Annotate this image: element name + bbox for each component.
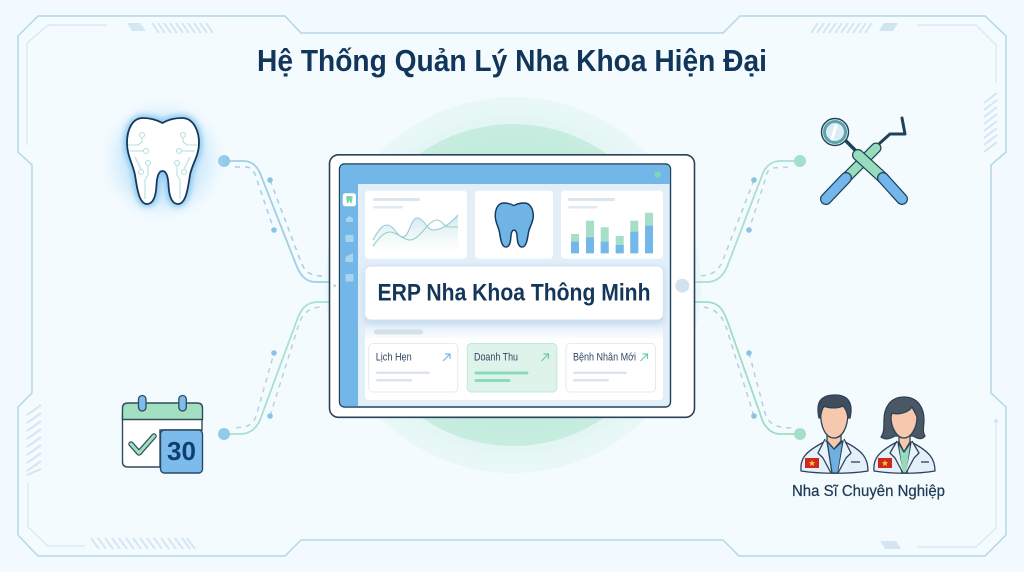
card: new patients: Bệnh Nhân Mới [573, 352, 636, 364]
card: line chart [365, 191, 467, 259]
label: professional dentists: Nha Sĩ Chuyên Nghiệp [792, 483, 945, 500]
banner: ERP [365, 266, 663, 320]
card: bar chart [561, 191, 663, 259]
card: revenue [467, 344, 557, 392]
card: revenue: Doanh Thu [474, 352, 518, 364]
tablet device [330, 155, 694, 417]
icon: glowing tooth [99, 96, 227, 224]
title: Hệ Thống Quản Lý Nha Khoa Hiện Đại [257, 43, 767, 78]
background circles [325, 97, 701, 473]
icon: female dentist [874, 397, 935, 473]
icon: crossed dental instruments [822, 118, 905, 199]
icon: calendar [122, 396, 202, 473]
card: appointments: Lịch Hẹn [376, 352, 412, 364]
lower panel [365, 318, 663, 400]
sidebar icons [343, 193, 356, 282]
banner: ERP: ERP Nha Khoa Thông Minh [378, 280, 650, 306]
tablet home button [675, 279, 689, 293]
icon: male dentist [801, 395, 868, 473]
connector: dentists to tablet [694, 302, 806, 440]
card: appointments [369, 344, 458, 392]
connector: tooth to tablet [218, 155, 330, 282]
card: tooth [475, 191, 553, 259]
connector: calendar to tablet [218, 302, 330, 440]
card: new patients [566, 344, 656, 392]
tablet screen [340, 164, 670, 407]
icon: calendar: 30 [167, 436, 196, 466]
connector: instruments to tablet [694, 155, 806, 282]
